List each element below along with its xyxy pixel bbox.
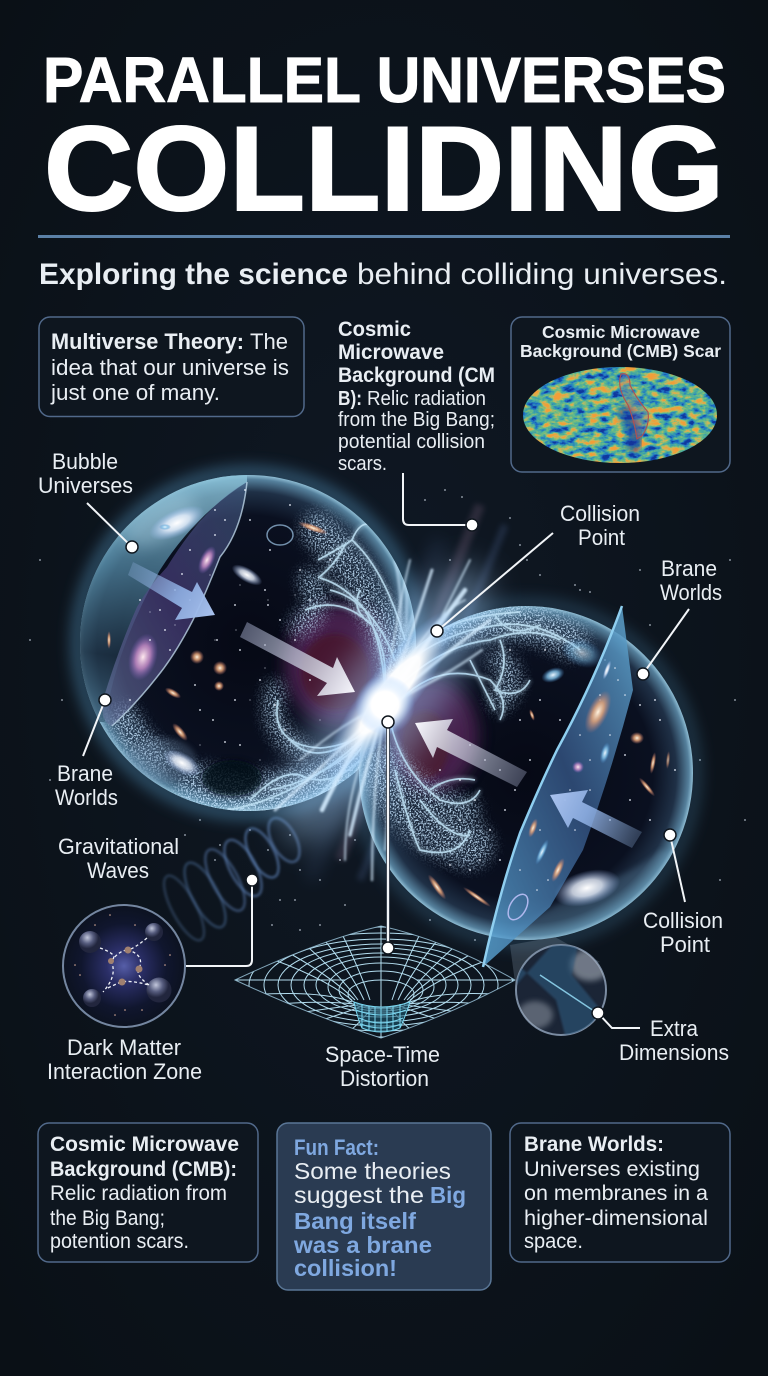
panel: fun fact: collision! bbox=[294, 1255, 397, 1281]
illustration: extra dimensions inset bbox=[510, 937, 610, 1040]
panel: cosmic microwave background definition: Background (CMB): bbox=[50, 1158, 237, 1181]
illustration: gravitational waves bbox=[157, 813, 306, 945]
illustration: collision burst bbox=[249, 541, 521, 880]
text block: cosmic microwave background: Microwave bbox=[338, 341, 444, 364]
label: collision point right: Collision bbox=[643, 908, 723, 933]
label: gravitational waves bbox=[58, 834, 179, 883]
panel: CMB scar map: Cosmic Microwave bbox=[542, 322, 700, 342]
arrow: blue right bbox=[550, 790, 642, 848]
label: gravitational waves: Waves bbox=[87, 858, 149, 883]
background star field and streaks bbox=[30, 490, 745, 960]
label: dark matter interaction zone: Interaction Zone bbox=[47, 1059, 202, 1084]
callout dots bbox=[99, 519, 676, 1019]
title: PARALLEL UNIVERSES bbox=[43, 44, 726, 116]
label: dark matter interaction zone: Dark Matter bbox=[67, 1035, 181, 1060]
label: space-time distortion bbox=[325, 1042, 440, 1091]
illustration: bubble universe left bbox=[78, 470, 418, 813]
label: brane worlds right: Worlds bbox=[660, 580, 722, 605]
label: collision point top: Collision bbox=[560, 501, 640, 526]
panel: cosmic microwave background definition: potention scars. bbox=[50, 1230, 189, 1253]
subtitle: Exploring the science bbox=[39, 258, 348, 291]
illustration: dark matter interaction zone bbox=[63, 905, 185, 1027]
label: extra dimensions bbox=[619, 1016, 729, 1065]
panel: brane worlds definition: Brane Worlds: bbox=[524, 1133, 664, 1156]
label: collision point top: Point bbox=[578, 525, 625, 550]
brane sheet right bbox=[483, 606, 633, 967]
panel: brane worlds definition: on membranes in a bbox=[524, 1182, 708, 1205]
label: collision point right: Point bbox=[660, 932, 710, 957]
panel: brane worlds definition: Universes existing bbox=[524, 1158, 700, 1181]
panel: cosmic microwave background definition bbox=[38, 1123, 258, 1262]
panel: multiverse theory: idea that our universe is bbox=[51, 355, 289, 380]
panel: cosmic microwave background definition: Relic radiation from bbox=[50, 1182, 227, 1205]
title: COLLIDING bbox=[44, 102, 724, 236]
panel: cosmic microwave background definition: Cosmic Microwave bbox=[50, 1133, 239, 1156]
label: space-time distortion: Space-Time bbox=[325, 1042, 440, 1067]
label: bubble universes bbox=[38, 449, 133, 498]
panel: fun fact: Big bbox=[430, 1182, 466, 1208]
label: collision point right bbox=[643, 908, 723, 957]
panel: fun fact: suggest the bbox=[294, 1182, 424, 1208]
panel: brane worlds definition bbox=[510, 1123, 730, 1262]
label: gravitational waves: Gravitational bbox=[58, 834, 179, 859]
panel: fun fact: Fun Fact: bbox=[294, 1135, 379, 1160]
panel: multiverse theory: The bbox=[250, 329, 288, 354]
text block: cosmic microwave background: Cosmic bbox=[338, 318, 411, 341]
panel: multiverse theory: just one of many. bbox=[50, 380, 220, 405]
panel: fun fact: was a brane bbox=[293, 1232, 432, 1258]
label: dark matter interaction zone bbox=[47, 1035, 202, 1084]
title bbox=[43, 44, 726, 236]
arrow: white right bbox=[415, 719, 527, 787]
text block: cosmic microwave background: Background (CM bbox=[338, 364, 495, 387]
label: collision point top bbox=[560, 501, 640, 550]
text block: cosmic microwave background: Relic radiation bbox=[367, 388, 486, 410]
panel: multiverse theory: Multiverse Theory: bbox=[51, 329, 244, 354]
label: extra dimensions: Extra bbox=[650, 1016, 699, 1041]
panel: CMB scar map: Background (CMB) Scar bbox=[520, 341, 721, 361]
callout leaders bbox=[83, 473, 689, 1028]
label: space-time distortion: Distortion bbox=[340, 1066, 429, 1091]
panel: fun fact: Some theories bbox=[294, 1158, 451, 1184]
panel: brane worlds definition: higher-dimensional bbox=[524, 1207, 708, 1230]
subtitle: behind colliding universes. bbox=[357, 258, 727, 291]
panel: CMB scar map bbox=[511, 317, 730, 472]
label: brane worlds right bbox=[660, 556, 722, 605]
label: extra dimensions: Dimensions bbox=[619, 1040, 729, 1065]
label: brane worlds left bbox=[55, 761, 118, 810]
illustration: bubble universe right bbox=[357, 604, 695, 967]
arrow: white left bbox=[240, 622, 355, 696]
arrow: blue left bbox=[128, 562, 215, 620]
illustration: space-time distortion grid bbox=[233, 926, 529, 1043]
text block: cosmic microwave background: B): bbox=[338, 388, 362, 410]
label: brane worlds right: Brane bbox=[661, 556, 717, 581]
panel: cosmic microwave background definition: the Big Bang; bbox=[50, 1207, 165, 1230]
vertical callout line bbox=[386, 722, 390, 945]
text block: cosmic microwave background bbox=[338, 318, 495, 475]
text block: cosmic microwave background: scars. bbox=[338, 453, 387, 475]
label: bubble universes: Universes bbox=[38, 473, 133, 498]
panel: brane worlds definition: space. bbox=[524, 1230, 583, 1253]
panel: fun fact bbox=[277, 1123, 491, 1290]
label: bubble universes: Bubble bbox=[52, 449, 118, 474]
label: brane worlds left: Worlds bbox=[55, 785, 118, 810]
panel: multiverse theory bbox=[39, 317, 304, 416]
panel: fun fact: Bang itself bbox=[294, 1208, 416, 1234]
label: brane worlds left: Brane bbox=[57, 761, 113, 786]
text block: cosmic microwave background: from the Big Bang; bbox=[338, 409, 495, 431]
text block: cosmic microwave background: potential collision bbox=[338, 431, 485, 453]
